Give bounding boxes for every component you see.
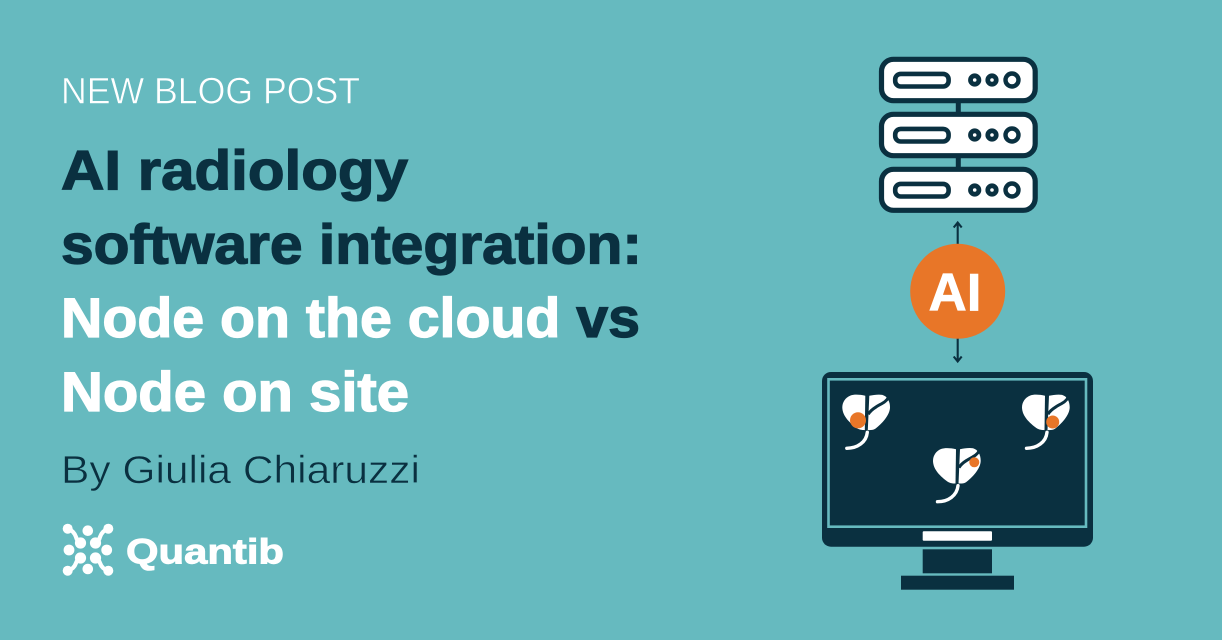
monitor screen outline (828, 379, 1086, 527)
server connectors (956, 102, 961, 168)
monitor neck (923, 549, 992, 573)
server unit 2 (882, 114, 1035, 156)
badge label: AI (928, 263, 982, 322)
monitor button bar (923, 531, 992, 541)
badge circle (910, 244, 1005, 339)
organ scan 3 (933, 448, 981, 502)
organ scan 2 (1022, 395, 1070, 448)
server unit 1 (882, 59, 1035, 101)
title line 1: AI radiology (61, 138, 408, 201)
icon: server stack (882, 59, 1035, 210)
title line 4: Node on site (61, 360, 409, 423)
eyebrow: new blog post: NEW BLOG POST (61, 70, 360, 111)
lesion 1 (850, 412, 866, 428)
monitor base (901, 576, 1014, 590)
lesion 3 (969, 457, 979, 467)
logo wordmark: Quantib (126, 532, 284, 572)
logo: Quantib (63, 524, 284, 576)
organ scan 1 (842, 395, 890, 448)
arrow: AI up to server (954, 222, 962, 246)
icon: monitor (822, 372, 1093, 590)
logo mark (63, 524, 113, 576)
lesion 2 (1046, 416, 1059, 428)
title (61, 138, 642, 423)
title line 3: Node on the cloud vs (61, 286, 640, 349)
monitor body (822, 372, 1093, 547)
server unit 3 (882, 169, 1035, 210)
author byline: By Giulia Chiaruzzi (61, 449, 420, 492)
arrow: AI down to monitor (954, 337, 962, 362)
AI badge (910, 244, 1005, 339)
title line 2: software integration: (61, 212, 642, 275)
